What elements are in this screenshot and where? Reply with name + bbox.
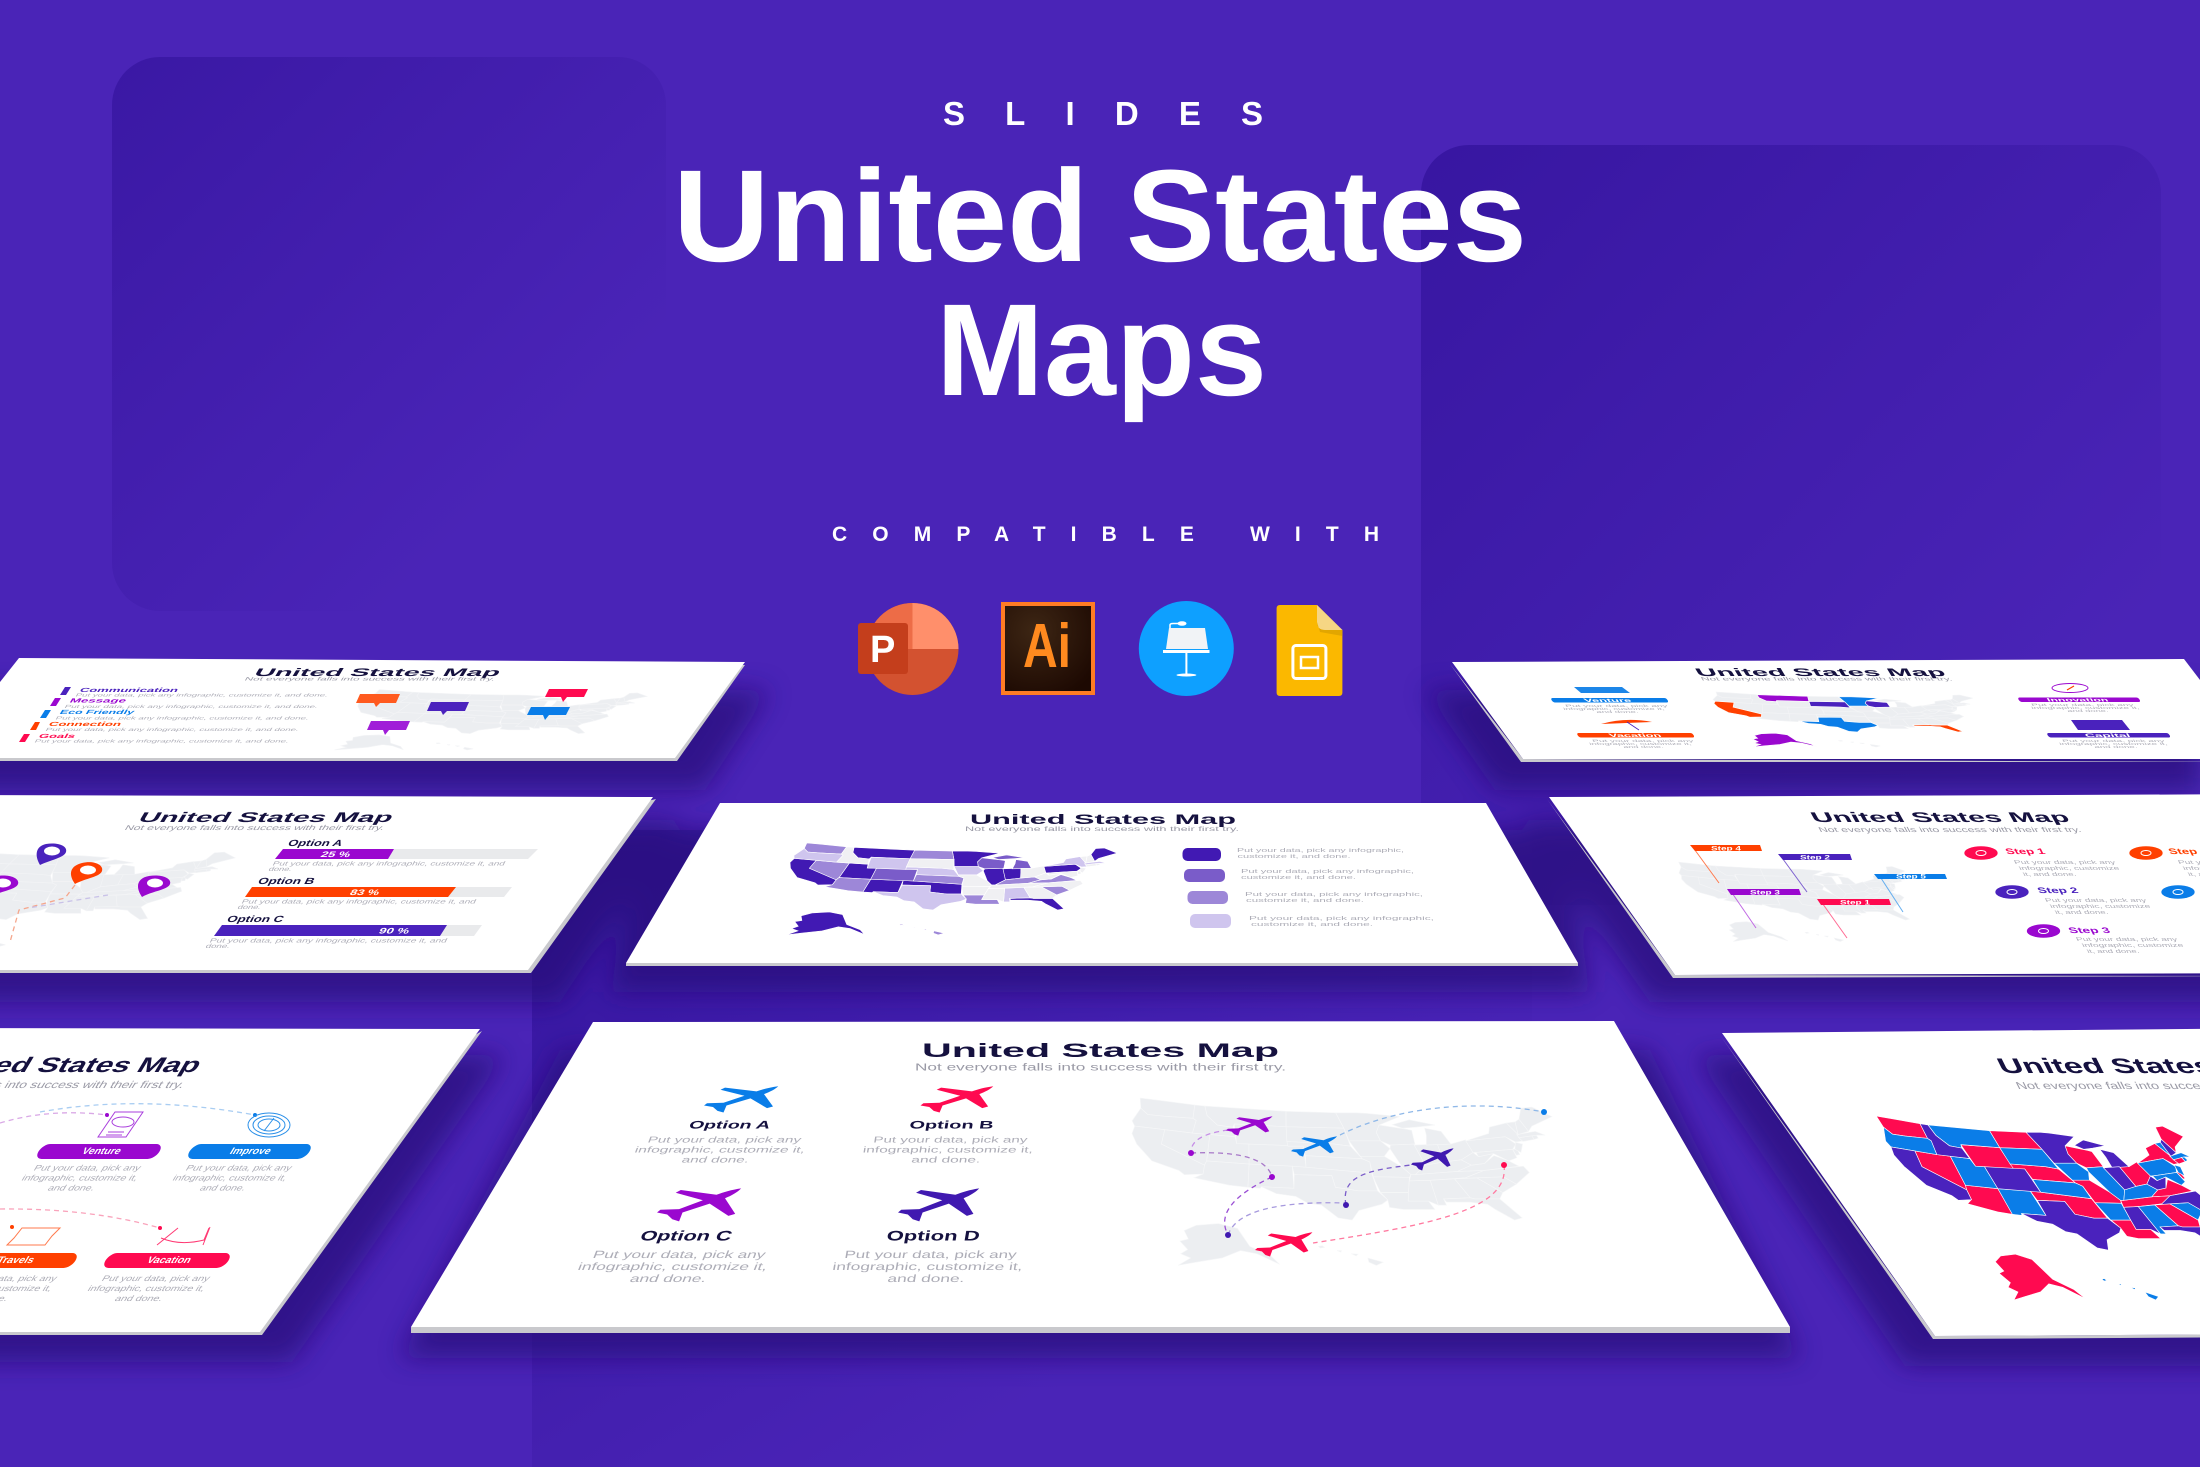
background panel: left rounded square: [112, 57, 666, 611]
panel: slide top right, highlighted states: [1450, 659, 2200, 762]
bar chart: options: Option B: [256, 876, 317, 887]
descriptions: Put your data, pick any: [32, 1163, 144, 1173]
pills and text: infographic, customize it,: [2058, 742, 2169, 746]
bar chart: options: Put your data, pick any infographic, customize it, and: [271, 861, 507, 867]
slide subtitle: Not everyone falls into success with their first try.: [915, 1062, 1286, 1074]
list: five items: Eco Friendly: [58, 709, 136, 716]
option C: and done.: [628, 1273, 708, 1285]
icon: suitcase: [2071, 720, 2130, 730]
icon: Illustrator: [1003, 604, 1093, 693]
map planes: [1226, 1116, 1454, 1256]
option D: [831, 1188, 1024, 1285]
legend: customize it, and done.: [1238, 854, 1351, 860]
legend: customize it, and done.: [1251, 922, 1374, 928]
pills and text: Capital: [2084, 733, 2133, 739]
pill: venture: Venture: [79, 1147, 124, 1157]
panel: slide middle left, progress bars: [0, 795, 656, 973]
option B: and done.: [911, 1155, 981, 1165]
step list: Step 3: [2066, 925, 2112, 935]
step list: [1964, 846, 2200, 955]
slide subtitle: Not everyone falls into success with their first try.: [1700, 677, 1955, 682]
icon: compass: [2052, 684, 2088, 692]
pill: vacation: [101, 1253, 233, 1268]
option B: [862, 1086, 1034, 1165]
bar chart: options: Option A: [286, 838, 345, 849]
map flags: Step 4: [1711, 846, 1742, 852]
step list: Put your data, pick any: [2013, 860, 2117, 866]
pills and text: and done.: [2093, 745, 2139, 749]
option C: Put your data, pick any: [591, 1249, 768, 1261]
pill: vacation: Vacation: [144, 1256, 193, 1266]
legend: [1182, 848, 1435, 928]
option A: [633, 1086, 807, 1165]
pills and text: Innovation: [2046, 698, 2110, 703]
bar chart: options: done.: [267, 866, 294, 873]
map flags: Step 1: [1840, 900, 1871, 906]
pills and text: [1550, 698, 2171, 749]
option C: [576, 1188, 769, 1285]
pills and text: and done.: [2066, 709, 2110, 713]
title: Maps: [936, 276, 1267, 423]
pills and text: Put your data, pick any: [2030, 703, 2135, 707]
bar chart: options: done.: [236, 904, 263, 911]
step list: it, and done.: [2086, 949, 2142, 955]
pill: improve: [185, 1144, 314, 1159]
eyebrow: slides: SLIDES: [943, 95, 1263, 132]
dashed routes: [0, 1104, 257, 1230]
option A: Option A: [687, 1120, 772, 1132]
pills and text: infographic, customize it,: [1562, 707, 1666, 711]
option C: infographic, customize it,: [576, 1261, 769, 1273]
panel: slide centre bottom, airplanes: [411, 1021, 1790, 1333]
panel: slide bottom right, red and blue map: [1720, 1028, 2200, 1339]
option C: Option C: [637, 1229, 735, 1245]
icon: vacation hammock: [157, 1227, 210, 1245]
descriptions: and done.: [198, 1183, 248, 1192]
icon: venture ticket: [1574, 687, 1630, 693]
map flags: [1690, 845, 1947, 938]
option B: Option B: [909, 1120, 994, 1132]
bar chart: options: [204, 838, 538, 950]
pills and text: Put your data, pick any: [1564, 704, 1669, 708]
list: five items: Put your data, pick any infographic, customize it, and done.: [44, 727, 300, 733]
pill: travels: [0, 1253, 80, 1268]
map: gray USA: [0, 847, 243, 947]
panel: slide bottom left, pills with icons: [0, 1028, 482, 1335]
list: five items: Put your data, pick any infographic, customize it, and done.: [33, 739, 290, 744]
pills and text: infographic, customize it,: [2030, 706, 2141, 710]
list: five items: Put your data, pick any infographic, customize it, and done.: [74, 693, 329, 698]
descriptions: infographic, customize it,: [171, 1173, 289, 1182]
descriptions: Put your data, pick any: [100, 1274, 213, 1283]
icon: Google Slides: [1277, 605, 1342, 696]
slide subtitle: Not everyone falls into success with their first try.: [1816, 825, 2083, 834]
descriptions: and done.: [113, 1294, 165, 1303]
option A: and done.: [680, 1155, 751, 1165]
icon: travels ticket: [7, 1228, 60, 1245]
map flags: Step 5: [1896, 874, 1927, 880]
pills and text: infographic, customize it,: [1588, 742, 1693, 746]
slide title: United States Map: [1993, 1054, 2200, 1078]
option D: Put your data, pick any: [843, 1249, 1019, 1261]
option A: Put your data, pick any: [646, 1135, 804, 1145]
descriptions: and done.: [46, 1183, 97, 1192]
slide title: United States Map: [922, 1041, 1279, 1062]
legend: Put your data, pick any infographic,: [1245, 892, 1424, 898]
route lines: [10, 885, 108, 942]
icon: Keynote: [1139, 601, 1234, 696]
step list: infographic, customize: [2081, 943, 2185, 949]
icon: venture document: [98, 1112, 143, 1137]
title: United States: [673, 142, 1527, 289]
step list: Put your data, pick any: [2075, 937, 2179, 943]
option B: Put your data, pick any: [873, 1135, 1030, 1145]
step list: Step 2: [2035, 885, 2080, 895]
bar chart: options: Option C: [225, 914, 286, 925]
descriptions: infographic, customize it,: [20, 1173, 140, 1182]
descriptions: Put your data, pick any: [184, 1163, 295, 1173]
bar chart: options: done.: [204, 943, 232, 950]
option D: infographic, customize it,: [831, 1261, 1024, 1273]
descriptions: infographic, customize it,: [86, 1284, 207, 1293]
list: five items: Communication: [78, 687, 180, 694]
pills and text: and done.: [1595, 710, 1640, 714]
map callouts: [356, 689, 588, 735]
map: gray USA: [1124, 1098, 1587, 1265]
step list: Put your data, pick any: [2044, 898, 2148, 904]
bar chart: options: 83 %: [348, 887, 382, 897]
panel: slide middle right, flags and steps: [1547, 794, 2200, 978]
legend: customize it, and done.: [1241, 875, 1357, 881]
legend: Put your data, pick any infographic,: [1237, 848, 1405, 854]
pills and text: Vacation: [1608, 733, 1663, 739]
list: five items: Goals: [37, 733, 78, 740]
pill: venture: [34, 1144, 164, 1159]
slide title: United States Map: [1692, 666, 1949, 679]
list: five items: Message: [68, 698, 129, 704]
map flags: Step 2: [1800, 856, 1831, 862]
map: gray USA: [325, 690, 652, 750]
list: five items: [19, 687, 329, 744]
pills and text: and done.: [1622, 745, 1665, 749]
descriptions: [0, 1163, 295, 1303]
slide subtitle: Not everyone falls into success with their first try.: [243, 677, 497, 682]
legend: Put your data, pick any infographic,: [1241, 869, 1415, 875]
option D: Option D: [885, 1228, 981, 1244]
step list: it, and done.: [2054, 910, 2111, 916]
slide title: United States Map: [135, 810, 397, 826]
icon: PowerPoint: [858, 603, 958, 695]
pills and text: Put your data, pick any: [1591, 739, 1695, 743]
list: five items: Put your data, pick any infographic, customize it, and done.: [54, 716, 310, 721]
option D: and done.: [886, 1273, 966, 1285]
icon: improve rings: [248, 1113, 290, 1137]
map flags: Step 3: [1750, 890, 1781, 896]
icon: umbrella: [1601, 720, 1652, 730]
step list: infographic, customize: [2018, 866, 2121, 872]
map pins: [0, 843, 170, 897]
slide title: United States Map: [251, 666, 504, 679]
panel shadows: [0, 690, 2200, 1366]
map: USA with highlighted states: [1706, 692, 2007, 747]
bar chart: options: Put your data, pick any infographic, customize it, and: [240, 899, 478, 905]
option B: infographic, customize it,: [862, 1145, 1034, 1155]
slide title: United States Map: [1807, 810, 2073, 826]
step list: Step 1: [2003, 846, 2047, 856]
slide subtitle: Not everyone falls into success with their first try.: [965, 826, 1239, 833]
panel: slide centre middle, purple choropleth: [626, 803, 1578, 966]
map: USA purple shades: [775, 843, 1119, 935]
icon: PowerPoint: P: [870, 629, 895, 671]
step list: infographic, customize: [2049, 904, 2152, 910]
list: five items: Put your data, pick any infographic, customize it, and done.: [63, 704, 319, 710]
pills and text: Venture: [1583, 698, 1633, 704]
background panel: right rounded square: [1421, 145, 2161, 905]
slide subtitle: Not everyone falls into success with their first try.: [123, 824, 387, 832]
option A: infographic, customize it,: [633, 1145, 807, 1155]
bar chart: options: Put your data, pick any infographic, customize it, and: [208, 938, 449, 944]
step list: Step 4: [2166, 846, 2200, 856]
map: USA red, blue and indigo: [1865, 1116, 2200, 1300]
pills and text: Put your data, pick any: [2061, 739, 2166, 743]
icon: Illustrator: Ai: [1023, 612, 1071, 681]
legend: customize it, and done.: [1246, 898, 1365, 904]
map: gray USA: [1670, 862, 1954, 942]
bar chart: options: 25 %: [319, 849, 353, 859]
legend: Put your data, pick any infographic,: [1249, 916, 1435, 922]
title: [673, 142, 1527, 423]
panel: slide top left, list with map callouts: [0, 658, 745, 761]
slide title: United States Map: [970, 812, 1236, 827]
pill: improve: Improve: [227, 1147, 274, 1157]
compatible with heading: COMPATIBLE WITH: [832, 523, 1379, 546]
bar chart: options: 90 %: [377, 926, 412, 935]
flight routes: [1188, 1106, 1547, 1243]
step list: it, and done.: [2022, 872, 2079, 878]
list: five items: Connection: [47, 721, 123, 728]
background panel: lower block: [532, 830, 1532, 1467]
